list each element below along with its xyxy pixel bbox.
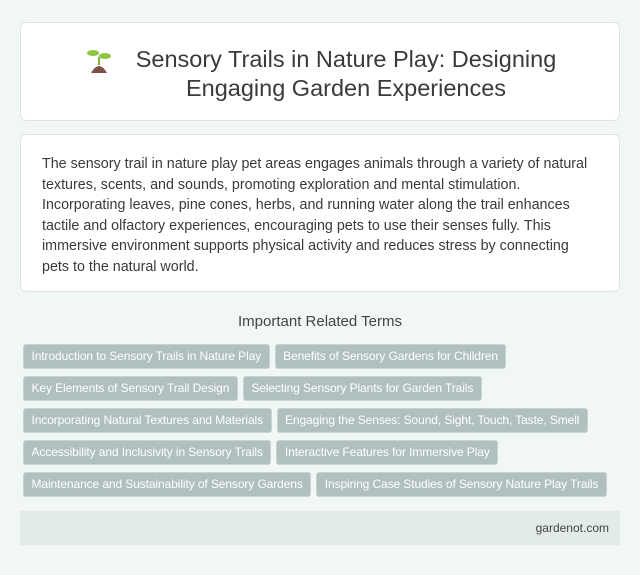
tags: Incorporating Natural Textures and Materials [32,413,263,427]
tags: Introduction to Sensory Trails in Nature Play [32,349,261,363]
tags: Engaging the Senses: Sound, Sight, Touch, Taste, Smell [285,413,579,427]
tags: Interactive Features for Immersive Play [285,445,490,459]
description card [20,134,620,292]
title card [20,22,620,121]
heading: related terms: Important Related Terms [238,313,402,330]
tags: Key Elements of Sensory Trail Design [32,381,229,395]
tags: Benefits of Sensory Gardens for Children [283,349,498,363]
footer [20,511,620,545]
footer: gardenot.com [536,521,609,535]
tags: Maintenance and Sustainability of Sensory Gardens [32,477,303,491]
tags [23,344,607,497]
tags: Accessibility and Inclusivity in Sensory Trails [32,445,263,459]
tags: Selecting Sensory Plants for Garden Trails [251,381,473,395]
title: Sensory Trails in Nature Play: Designing Engaging Garden Experiences [136,46,556,101]
description text: The sensory trail in nature play pet areas engages animals through a variety of natural textures, scents, and sounds, promoting exploration and mental stimulation. Incorporating leaves, pine cones, herbs, and running water along the trail enhances tactile and olfactory experiences, encouraging pets to use their senses fully. This immersive environment supports physical activity and reduces stress by connecting pets to the natural world. [42,156,587,275]
tags: Inspiring Case Studies of Sensory Nature Play Trails [325,477,598,491]
icon: seedling [87,50,111,73]
